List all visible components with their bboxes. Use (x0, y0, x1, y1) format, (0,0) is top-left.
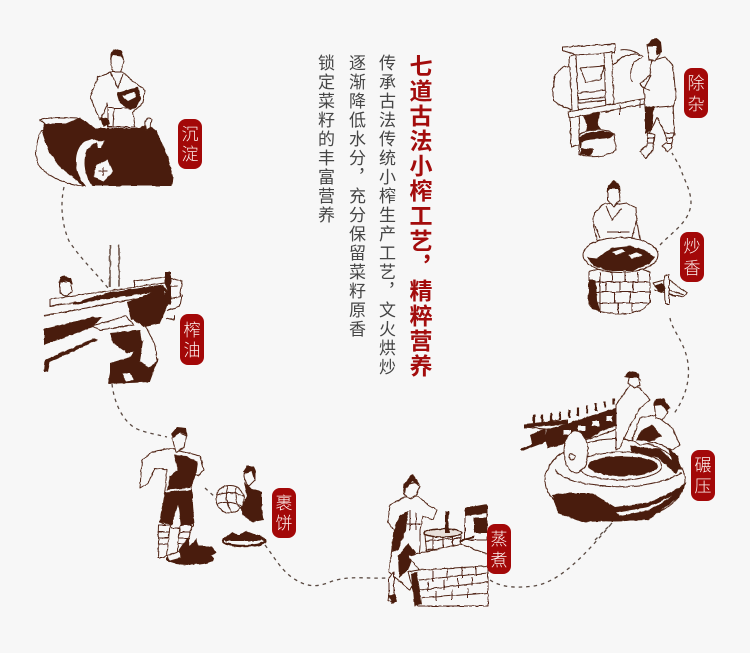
text column 2: 逐渐降低水分，充分保留菜籽原香 (346, 54, 365, 339)
illustration: frying (583, 180, 687, 314)
badge: removing impurities (684, 68, 708, 118)
badge: steaming: 煮 (490, 551, 508, 570)
badge: frying: 香 (684, 259, 700, 278)
badge: wrapping cakes: 裹 (276, 494, 292, 513)
illustration: oil press (44, 245, 182, 384)
badge: steaming: 蒸 (490, 530, 508, 549)
badge: wrapping cakes (272, 488, 296, 538)
badge: crushing: 碾 (694, 456, 712, 475)
badge: pressing oil (180, 314, 204, 365)
badge: frying (680, 232, 704, 282)
badge: steaming (487, 524, 511, 574)
badge: pressing oil: 油 (184, 341, 200, 360)
badge: removing impurities: 除 (688, 74, 704, 93)
illustration: steaming (388, 474, 490, 606)
badge: crushing: 压 (694, 477, 712, 496)
badge: settling: 淀 (182, 145, 198, 164)
text column 1: 传承古法传统小榨生产工艺，文火烘炒 (376, 54, 395, 377)
illustration: wrapping cakes (140, 427, 265, 565)
illustration: crushing (520, 371, 687, 522)
title: 七道古法小榨工艺，精粹营养 (406, 54, 432, 379)
dotted process path (62, 153, 691, 587)
text column 3: 锁定菜籽的丰富营养 (315, 54, 334, 225)
badge: wrapping cakes: 饼 (276, 514, 292, 533)
badge: crushing (691, 450, 715, 501)
badge: settling: 沉 (182, 125, 198, 144)
illustration: settling jar and worker (36, 49, 173, 186)
badge: settling (178, 119, 202, 169)
badge: removing impurities: 杂 (688, 95, 704, 114)
badge: pressing oil: 榨 (184, 321, 200, 340)
illustration: removing impurities (553, 38, 676, 158)
badge: frying: 炒 (684, 237, 700, 256)
